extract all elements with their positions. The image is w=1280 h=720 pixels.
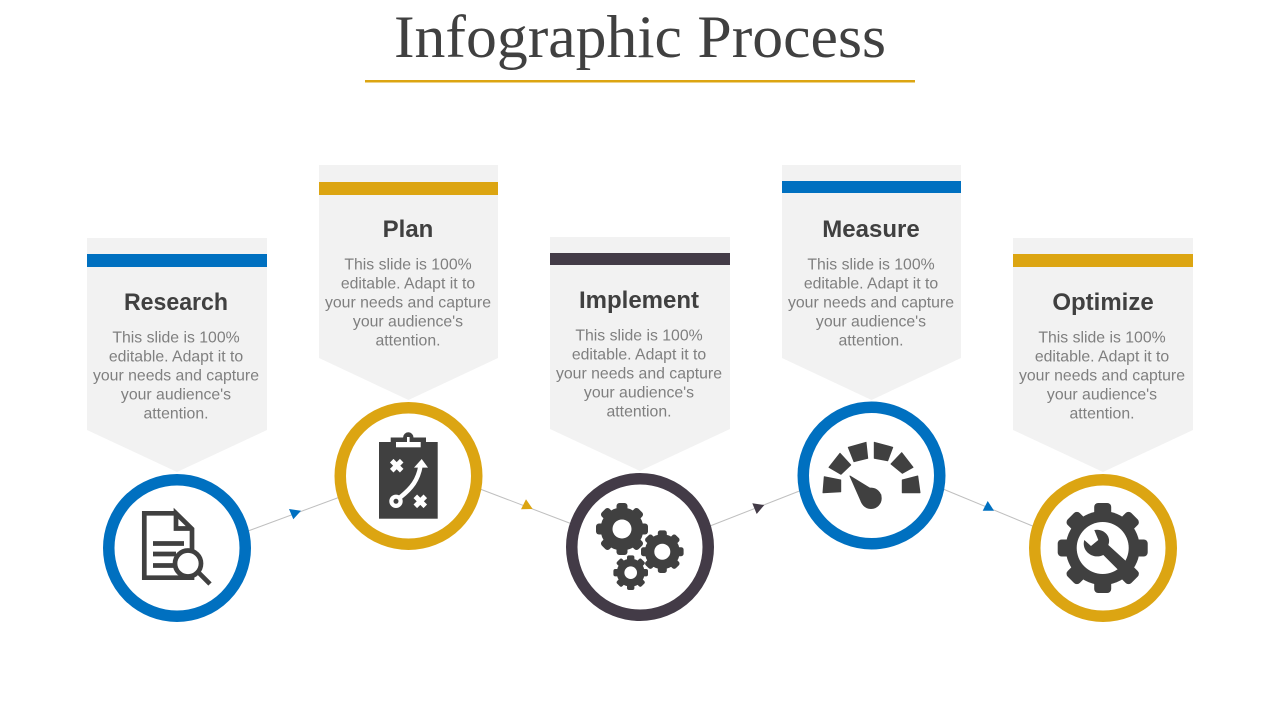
gear: large: [596, 503, 648, 555]
text: implement body: your needs and capture: [556, 366, 722, 382]
heading: implement: Implement: [579, 287, 699, 314]
panel: optimize: [1013, 238, 1193, 472]
text: optimize body: attention.: [1070, 406, 1134, 422]
text: research body: attention.: [144, 406, 208, 422]
text: measure body: This slide is 100%: [807, 256, 935, 274]
text: plan body: your audience's: [353, 314, 463, 330]
heading: research: Research: [124, 289, 228, 316]
text: optimize body: your needs and capture: [1019, 368, 1185, 384]
text: measure body: editable. Adapt it to: [804, 276, 938, 292]
text: plan body: editable. Adapt it to: [341, 276, 475, 292]
title: Infographic Process: [394, 4, 886, 70]
text: implement body: This slide is 100%: [575, 328, 703, 344]
text: plan body: your needs and capture: [325, 294, 491, 312]
text: research body: your needs and capture: [93, 368, 259, 384]
text: research body: your audience's: [121, 386, 231, 404]
heading: plan: Plan: [383, 216, 433, 243]
icon: gear with wrench: [1058, 503, 1148, 593]
text: implement body: attention.: [606, 404, 672, 420]
heading: optimize: Optimize: [1052, 289, 1154, 316]
icon: speedometer gauge: [823, 442, 920, 508]
text: optimize body: your audience's: [1047, 386, 1157, 404]
circle: implement: [572, 479, 708, 615]
text: research body: This slide is 100%: [112, 330, 240, 346]
text: optimize body: editable. Adapt it to: [1035, 348, 1169, 366]
title underline: [365, 80, 915, 82]
panel: implement: [550, 237, 730, 471]
text: measure body: your needs and capture: [788, 294, 954, 312]
connector: research to plan: [248, 497, 340, 531]
text: optimize body: This slide is 100%: [1038, 330, 1166, 346]
connector: measure to optimize: [943, 489, 1035, 527]
circle: optimize: [1035, 480, 1171, 616]
gear: small: [613, 555, 648, 590]
circle: measure: [803, 407, 940, 544]
panel: research: [87, 238, 267, 472]
text: implement body: your audience's: [584, 384, 694, 402]
icon: document with magnifier: [144, 513, 210, 584]
icon: clipboard with strategy: [379, 432, 438, 519]
text: plan body: This slide is 100%: [344, 256, 472, 274]
circle: plan: [340, 408, 477, 544]
connector: implement to measure: [710, 490, 802, 526]
panel: measure: [782, 165, 961, 400]
heading: measure: Measure: [822, 216, 920, 243]
text: research body: editable. Adapt it to: [109, 348, 243, 366]
panel: plan: [319, 165, 498, 400]
text: implement body: editable. Adapt it to: [572, 346, 706, 364]
text: measure body: your audience's: [816, 314, 926, 330]
text: plan body: attention.: [376, 332, 440, 350]
gear: medium: [641, 530, 684, 573]
circle: research: [109, 480, 245, 616]
connector: plan to implement: [480, 489, 572, 524]
text: measure body: attention.: [838, 332, 904, 350]
icon: three gears: [596, 503, 684, 590]
